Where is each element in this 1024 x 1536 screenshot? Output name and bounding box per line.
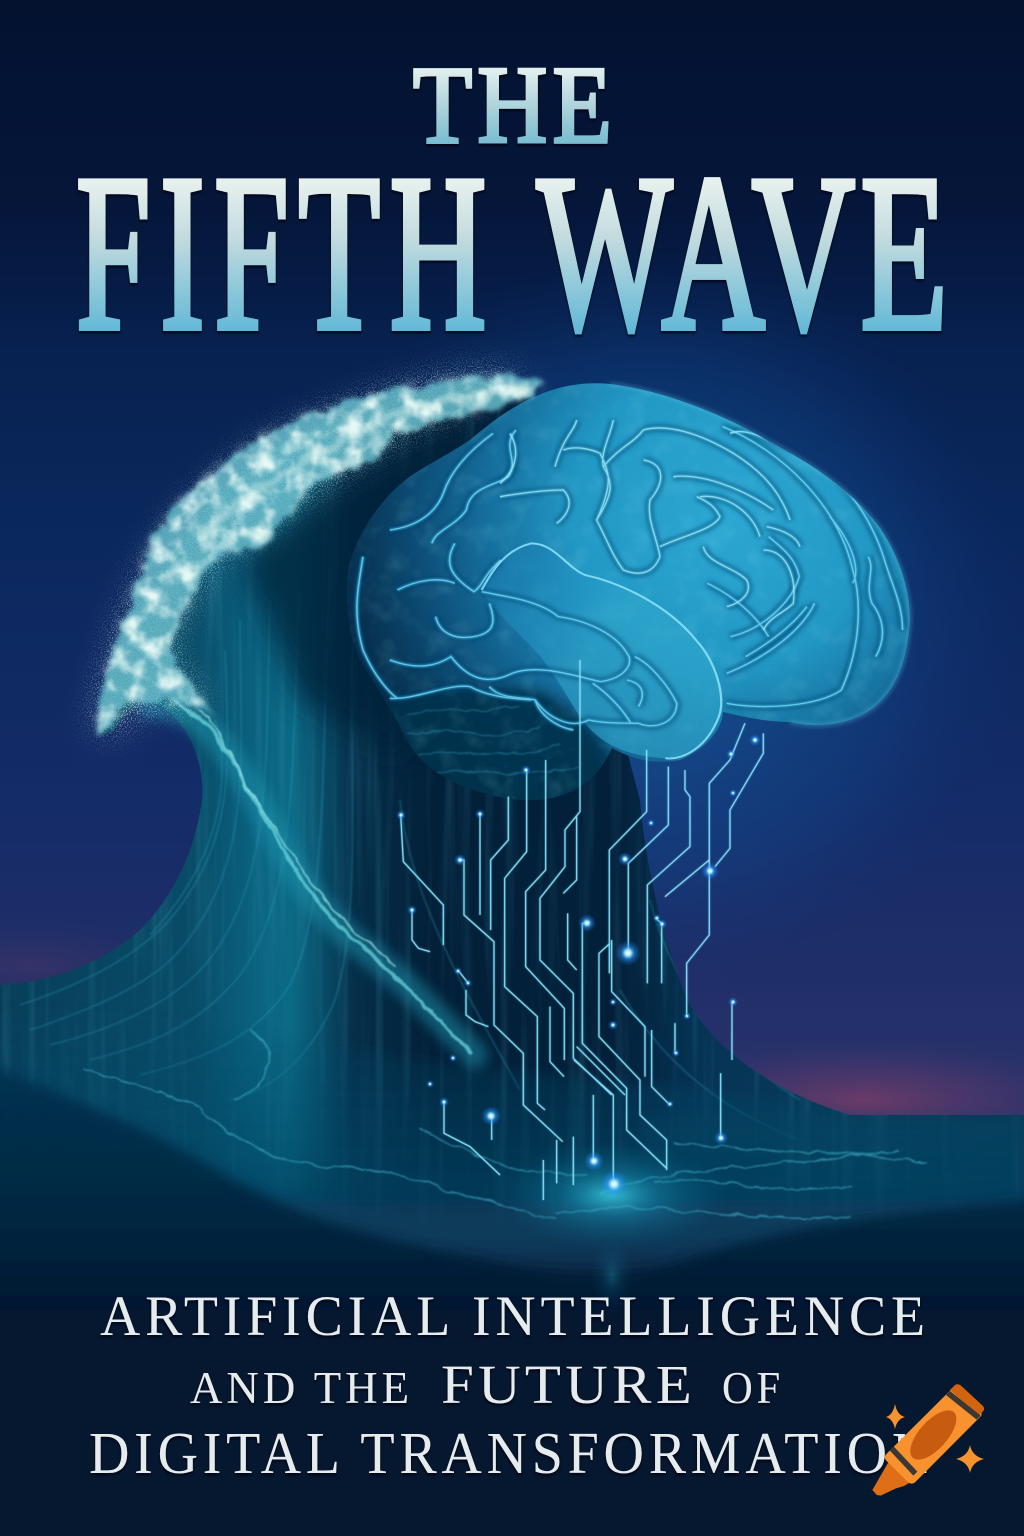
cerebellum — [406, 682, 614, 800]
temporal lobe edge — [482, 543, 721, 758]
bottom band — [0, 1310, 1024, 1536]
subtitle line 3: DIGITAL TRANSFORMATION — [89, 1420, 937, 1486]
icon: sparkle large — [956, 1445, 984, 1473]
horizon softening — [791, 1136, 792, 1137]
cerebellum folds — [405, 705, 580, 774]
crest spray — [95, 370, 530, 735]
gyri glow — [357, 427, 903, 730]
crayon cap — [950, 1384, 984, 1416]
title: THE: THE — [413, 44, 617, 166]
subtitle line 2: FUTURE — [441, 1354, 696, 1415]
wave crest foam — [95, 370, 545, 735]
crest white water — [98, 376, 545, 733]
brain — [340, 375, 920, 815]
subtitle — [89, 1285, 937, 1486]
shaded hollow under crest — [230, 434, 434, 752]
subtitle line 2 — [190, 1354, 784, 1415]
brain silhouette — [347, 383, 910, 800]
gyri highlights — [357, 427, 903, 730]
dark foreground swell — [0, 1060, 1024, 1400]
sulci shadows — [357, 427, 903, 730]
brain rim light — [610, 384, 910, 725]
subtitle line 2: OF — [722, 1363, 784, 1413]
icon: crayon watermark — [872, 1384, 984, 1496]
subtitle line 2: AND THE — [190, 1363, 413, 1413]
sea foam lines — [85, 1030, 928, 1220]
temporal lobe — [482, 543, 721, 758]
crayon body — [885, 1389, 982, 1484]
title: FIFTH WAVE: FIFTH — [76, 129, 496, 377]
subtitle line 1: ARTIFICIAL INTELLIGENCE — [100, 1285, 930, 1348]
crayon bands — [946, 1391, 981, 1420]
bright water ribbon — [150, 700, 475, 1055]
crayon tip — [872, 1462, 910, 1496]
icon: sparkle small — [886, 1404, 905, 1429]
wave — [0, 394, 1024, 1280]
wave water streaks — [2, 411, 945, 1160]
crest base — [98, 376, 545, 733]
crayon label — [902, 1403, 964, 1467]
circuit traces — [401, 660, 763, 1200]
cortical texture — [340, 375, 920, 805]
circuit nodes — [396, 734, 761, 1198]
wave body — [0, 382, 1024, 1320]
glow at ocean — [492, 1140, 732, 1315]
crest highlight — [200, 386, 530, 535]
sea surface — [0, 1000, 1024, 1320]
